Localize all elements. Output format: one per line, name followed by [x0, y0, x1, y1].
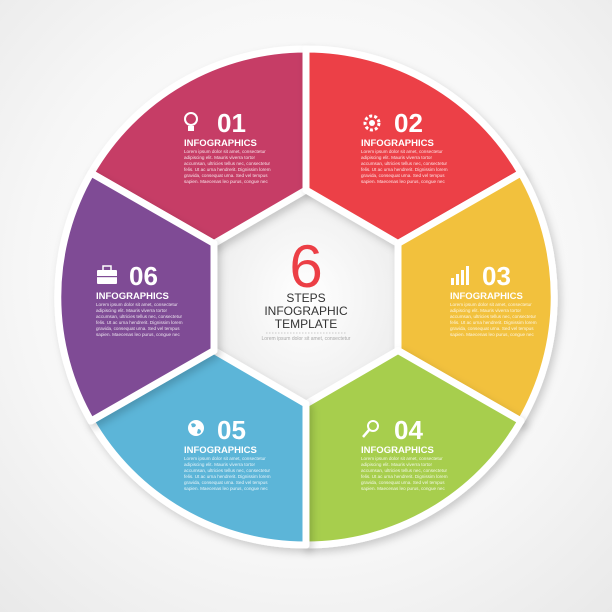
step 04 text: INFOGRAPHICS — [361, 445, 434, 456]
step 02 text: felis. Ut ac urna hendrerit. Dignissim lorem — [361, 167, 448, 172]
step 05 text: sapien. Maecenas leo purus, congue nec — [184, 486, 268, 491]
step 03 text: INFOGRAPHICS — [450, 291, 523, 302]
segment 01 — [91, 49, 306, 244]
step 06 text: 06 — [129, 261, 158, 291]
step 04 text: Lorem ipsum dolor sit amet, consectetur — [361, 456, 443, 461]
step 06 text: Lorem ipsum dolor sit amet, consectetur — [96, 302, 178, 307]
step 03 text: accumsan, ultricies tellus nec, consectetur — [450, 314, 537, 319]
step 03 text: Lorem ipsum dolor sit amet, consectetur — [450, 302, 532, 307]
step 04 text: gravida, consequat urna. Sed vel tempus — [361, 480, 445, 485]
step 01 text: adipiscing elit. Mauris viverra tortor — [184, 155, 255, 160]
center hexagon — [214, 190, 398, 404]
step 01 text: gravida, consequat urna. Sed vel tempus — [184, 173, 268, 178]
step 04 text: adipiscing elit. Mauris viverra tortor — [361, 462, 432, 467]
icon: bar chart — [451, 266, 469, 285]
step 05 text: felis. Ut ac urna hendrerit. Dignissim lorem — [184, 474, 271, 479]
center title: 6 — [289, 233, 323, 300]
step 02 text: sapien. Maecenas leo purus, congue nec — [361, 179, 445, 184]
icon: gear — [365, 116, 379, 130]
step 02 text: Lorem ipsum dolor sit amet, consectetur — [361, 149, 443, 154]
step 03 text: sapien. Maecenas leo purus, congue nec — [450, 332, 534, 337]
segment 06 — [58, 173, 214, 421]
step 04 text: felis. Ut ac urna hendrerit. Dignissim lorem — [361, 474, 448, 479]
step 06 text: INFOGRAPHICS — [96, 291, 169, 302]
icon: briefcase — [97, 266, 117, 284]
center title: STEPS — [286, 291, 326, 305]
step 05 text: INFOGRAPHICS — [184, 445, 257, 456]
step 01 text: sapien. Maecenas leo purus, congue nec — [184, 179, 268, 184]
step 02 text: accumsan, ultricies tellus nec, consectetur — [361, 161, 448, 166]
step 06 text: sapien. Maecenas leo purus, congue nec — [96, 332, 180, 337]
step 02 text: INFOGRAPHICS — [361, 138, 434, 149]
step 05 text: Lorem ipsum dolor sit amet, consectetur — [184, 456, 266, 461]
step 05 text: accumsan, ultricies tellus nec, consectetur — [184, 468, 271, 473]
step 03 text: 03 — [482, 261, 511, 291]
step 05 text: adipiscing elit. Mauris viverra tortor — [184, 462, 255, 467]
center title — [262, 233, 351, 342]
center title: INFOGRAPHIC — [264, 304, 348, 318]
step 01 text: felis. Ut ac urna hendrerit. Dignissim lorem — [184, 167, 271, 172]
segment 03 — [398, 173, 554, 421]
step 03 text: gravida, consequat urna. Sed vel tempus — [450, 326, 534, 331]
center title: Lorem ipsum dolor sit amet, consectetur — [262, 336, 351, 342]
step 04 text: sapien. Maecenas leo purus, congue nec — [361, 486, 445, 491]
step 06 text — [96, 261, 183, 337]
step 03 text: felis. Ut ac urna hendrerit. Dignissim lorem — [450, 320, 537, 325]
step 01 text: INFOGRAPHICS — [184, 138, 257, 149]
step 04 text: accumsan, ultricies tellus nec, consectetur — [361, 468, 448, 473]
step 02 text: gravida, consequat urna. Sed vel tempus — [361, 173, 445, 178]
step 02 text — [361, 108, 448, 184]
step 03 text: adipiscing elit. Mauris viverra tortor — [450, 308, 521, 313]
step 01 text: accumsan, ultricies tellus nec, consectetur — [184, 161, 271, 166]
segment 05 — [91, 350, 306, 545]
step 01 text: 01 — [217, 108, 246, 138]
step 04 text: 04 — [394, 415, 423, 445]
step 06 text: felis. Ut ac urna hendrerit. Dignissim lorem — [96, 320, 183, 325]
icon: globe — [188, 420, 204, 436]
segment 04 — [306, 350, 521, 545]
step 05 text: gravida, consequat urna. Sed vel tempus — [184, 480, 268, 485]
step 06 text: gravida, consequat urna. Sed vel tempus — [96, 326, 180, 331]
step 06 text: adipiscing elit. Mauris viverra tortor — [96, 308, 167, 313]
step 05 text: 05 — [217, 415, 246, 445]
step 05 text — [184, 415, 271, 491]
step 01 text: Lorem ipsum dolor sit amet, consectetur — [184, 149, 266, 154]
icon: magnifier — [363, 421, 378, 437]
step 01 text — [184, 108, 271, 184]
step 02 text: 02 — [394, 108, 423, 138]
step 02 text: adipiscing elit. Mauris viverra tortor — [361, 155, 432, 160]
step 04 text — [361, 415, 448, 491]
segment 02 — [306, 49, 521, 244]
icon: bulb — [185, 113, 197, 131]
step 06 text: accumsan, ultricies tellus nec, consectetur — [96, 314, 183, 319]
step 03 text — [450, 261, 537, 337]
center title: TEMPLATE — [275, 317, 337, 331]
